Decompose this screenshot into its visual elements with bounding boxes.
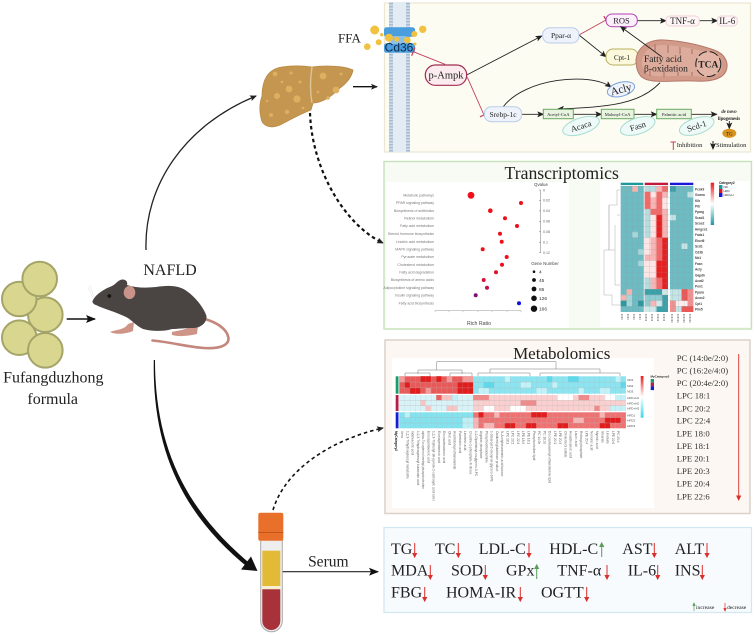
sample labels (627, 378, 639, 428)
Qvalue scale: 0.08 (543, 230, 550, 234)
pathway labels: Pyruvate metabolism (401, 255, 434, 259)
icon: formula pills (2, 262, 63, 368)
node: Malonyl-CoA (601, 109, 634, 119)
metabolite labels: Nervonic acid (590, 431, 594, 451)
arrow: lipid list decrease (737, 354, 741, 500)
sample labels: HFD+H3 (627, 407, 639, 411)
sample labels: HFD3 (627, 424, 635, 428)
gene number legend: 4 (539, 270, 542, 276)
membrane stripes (389, 2, 410, 152)
metabolite labels: Hexadecanoic acid (569, 431, 573, 458)
arrow: dashed liver to transcriptomics (310, 113, 383, 243)
list: altered lipids: LPE 20:3 (677, 466, 710, 476)
metabolite labels: LPE 18:0 (521, 431, 525, 444)
node: ROS (606, 14, 637, 27)
node: ROS: ROS (613, 16, 630, 26)
metabolite labels: 1,2-Dipalmitoyl-sn-glycero-3-PC (474, 431, 478, 477)
gene labels: Acat2 (695, 279, 704, 283)
pathway labels: Linoleic acid metabolism (396, 240, 434, 244)
metabolite labels: Linolenic acid (463, 431, 467, 451)
metabolite labels: Stearate (600, 431, 604, 443)
sample labels (622, 314, 690, 323)
chart: gene expression heatmap (604, 181, 735, 323)
x axis (435, 311, 521, 312)
metabolite labels: LPE 22:6 (611, 431, 615, 444)
gene labels: Gapdh (695, 273, 705, 277)
gene labels: Me1 (695, 256, 701, 260)
node: Fasn (618, 113, 657, 139)
serum marker names: INS (675, 563, 700, 580)
list: altered lipids: LPC 20:2 (677, 403, 710, 413)
metabolite labels: LPE 18:1 (526, 431, 530, 444)
pathway labels: MAPK signaling pathway (395, 248, 434, 252)
heading: Transcriptomics: Transcriptomics (505, 163, 619, 183)
legend: inhibition and stimulation: Inhibition (677, 142, 703, 149)
category legend: ND (724, 185, 729, 189)
metabolite labels: Docosahexaenoic acid (442, 431, 446, 463)
node: Acaca (560, 113, 602, 139)
serum marker names: MDA (391, 563, 429, 580)
sample labels: HFD1 (627, 413, 635, 417)
gene labels: Scad1 (695, 216, 705, 220)
gene number legend: 166 (539, 306, 547, 312)
metabolite labels: Retinoyl phosphate (579, 431, 583, 459)
metabolite labels: Phosphoethanolamine (484, 431, 488, 463)
list: altered lipids: LPC 22:4 (677, 416, 711, 426)
gene labels: Gcana (695, 193, 705, 197)
icon: fatty acid droplets (364, 26, 426, 50)
serum marker names: ALT (675, 541, 705, 558)
metabolite labels: Eicosapentaenoic acid (437, 431, 441, 463)
second group detail (645, 186, 656, 289)
icon: mitochondrion: TCA (698, 60, 718, 70)
category legend: HFD+H (724, 193, 734, 197)
metabolite labels: MyCategory2 (394, 431, 398, 451)
node: Ppar-alpha: Ppar-α (551, 31, 571, 40)
list: altered lipids: PC (16:2e/4:0) (677, 365, 728, 375)
metabolite labels: Linoleate (606, 431, 610, 444)
category legend (650, 374, 670, 390)
node: Fasn: Fasn (629, 119, 648, 133)
metabolite labels: Oleic acid (447, 431, 451, 445)
serum marker names: FBG (391, 584, 423, 601)
panel: metabolomics (385, 340, 750, 514)
category legend (719, 181, 735, 197)
metabolite labels: Lauric acid (574, 431, 578, 447)
pathway labels: Biosynthesis of amino acids (391, 278, 434, 282)
increase arrows (535, 543, 604, 579)
gene labels: Pparg (695, 210, 704, 214)
gene labels: Ppara (695, 290, 704, 294)
node: Palmitic acid (657, 109, 691, 119)
gene labels: Cd36 (695, 250, 703, 254)
gene labels: Fads1 (695, 233, 704, 237)
arrow: serum line (282, 571, 378, 573)
dendrogram (604, 190, 620, 305)
metabolite labels: Arachidonoyl ethanolamide (453, 431, 457, 470)
serum marker names (391, 541, 705, 601)
list: altered lipids (677, 353, 728, 501)
metabolite labels: LPC 22:4 (516, 431, 520, 445)
metabolite labels (394, 431, 620, 502)
category legend: MyCategory2 (650, 374, 670, 378)
metabolite labels: alpha-Tocopherol methyl phosphocholine (421, 431, 425, 489)
pathway labels: Fatty acid degradation (399, 270, 434, 274)
Qvalue scale: 0.12 (543, 251, 550, 255)
node: Srebp-1c: Srebp-1c (489, 110, 517, 119)
metabolite labels: Phosphocholine lipid (532, 431, 536, 460)
metabolite labels: N-Acetylneuraminic acid lactose (500, 431, 504, 477)
node: IL-6: IL-6 (719, 16, 736, 26)
dendrogram (405, 362, 620, 376)
pathway labels: Insulin signaling pathway (395, 294, 434, 298)
gene number legend: 85 (539, 287, 545, 293)
metabolite labels: PC 20:4 (616, 431, 620, 443)
metabolite labels: Oxidized glutathione product (495, 431, 499, 472)
text: de novo lipogenesis: lipogenesis (718, 117, 740, 122)
metabolite labels: LPE 20:4 (584, 431, 588, 444)
x axis title: Rich Ratio (467, 321, 491, 327)
serum marker names: TNF-α (557, 563, 602, 580)
text: formula label: Fufangduzhong (3, 370, 104, 387)
node: Ppar-alpha (543, 28, 579, 43)
serum marker names: OGTT (541, 584, 584, 601)
Qvalue scale (534, 182, 550, 255)
gene labels: Klb (695, 199, 700, 203)
gene labels: Plin5 (695, 308, 703, 312)
metabolite labels: Palmitoleic acid (458, 431, 462, 453)
metabolite labels: 1-Stearoyl-2-oleoyl-sn-glycero-3-PE (490, 431, 494, 482)
pathway labels: Steroid hormone biosynthesis (388, 232, 434, 236)
serum marker names: AST (622, 541, 653, 558)
arrow: dashed tube to metabolomics (273, 428, 383, 510)
Qvalue scale: 0 (543, 188, 545, 192)
color scale (641, 376, 644, 418)
category legend: Category2 (719, 181, 735, 185)
legend: increase and decrease: increase (696, 605, 715, 611)
serum marker names: IL-6 (628, 563, 656, 580)
gene number legend: 45 (539, 278, 545, 284)
arrow: liver to pathway panel (353, 86, 377, 88)
gene labels: Fasn (695, 262, 702, 266)
bubbles (468, 192, 523, 305)
legend: inhibition and stimulation: Stimulation (716, 142, 747, 149)
sample labels: ND3 (627, 390, 634, 394)
node: Srebp-1c (484, 107, 522, 122)
node: TG (722, 129, 736, 138)
node: Malonyl-CoA: Malonyl-CoA (605, 112, 631, 117)
Qvalue scale: 0.02 (543, 199, 550, 203)
gene labels: Elovl6 (695, 239, 705, 243)
Qvalue scale: 0.04 (543, 209, 550, 213)
color scale (711, 183, 714, 225)
node: Acaca: Acaca (569, 118, 593, 134)
sample labels: HFD+H1 (627, 396, 639, 400)
list: altered lipids: LPE 22:6 (677, 491, 710, 501)
Qvalue scale: 0.06 (543, 220, 550, 224)
Qvalue scale: Qvalue (534, 182, 549, 187)
gene labels: Pcsk9 (695, 187, 704, 191)
heat cells (621, 186, 693, 312)
gene number legend (531, 261, 559, 312)
label: serum: Serum (308, 554, 349, 571)
icon: mouse (88, 279, 229, 348)
metabolite labels: Creatine-1-phosphate-6-ribose (468, 431, 472, 475)
node: Acly: Acly (609, 81, 633, 98)
metabolite labels: 1,2,3-Trihydroxybenzyl butanoate acid (416, 431, 420, 485)
metabolite labels: Docosahexaenoyl ethanolamine lipid (548, 431, 552, 483)
icon: Cd36 transporter (384, 27, 415, 55)
metabolite labels: Myristic acid (595, 431, 599, 449)
gene labels: Acly (695, 268, 702, 272)
metabolite labels: 1,2,3-Trihydroxybenzyl metabolite (405, 431, 409, 479)
metabolite labels: PC 14:0e (537, 431, 541, 445)
gene number legend: Gene Number (531, 261, 559, 266)
metabolite labels: Indoleacetic acid (410, 431, 414, 455)
text: de novo lipogenesis: de novo (721, 110, 737, 115)
pathway labels: Fatty acid metabolism (400, 224, 434, 228)
label: FFA: FFA (338, 31, 361, 46)
pathway connectors (413, 20, 729, 128)
gene labels: Scd1 (695, 245, 703, 249)
label: NAFLD: NAFLD (143, 262, 197, 279)
node: TNF-alpha: TNF-α (670, 16, 695, 26)
node: p-Ampk: p-Ampk (428, 70, 464, 82)
list: altered lipids: LPE 18:0 (677, 428, 710, 438)
icon: Cd36 transporter: Cd36 (385, 41, 414, 55)
heading: Metabolomics: Metabolomics (513, 344, 610, 363)
serum marker names: TG (391, 541, 413, 558)
gene labels: Hmgcs1 (695, 227, 708, 231)
metabolite labels: LPC 18:1 (505, 431, 509, 445)
metabolite labels: LPE 20:1 (553, 431, 557, 444)
gene labels: Scos2 (695, 222, 705, 226)
pathway labels: Fatty acid biosynthesis (399, 302, 434, 306)
list: altered lipids: LPE 20:1 (677, 454, 710, 464)
icon: blood tube (258, 513, 283, 632)
serum marker names: HOMA-IR (446, 584, 517, 601)
legend: increase and decrease (693, 603, 747, 611)
chart: KEGG bubble plot (383, 182, 559, 327)
list: altered lipids: LPE 20:4 (677, 479, 710, 489)
icon: mitochondrion: β-oxidation (644, 64, 688, 74)
metabolite labels: LPE 20:3 (558, 431, 562, 444)
column group bars (621, 183, 693, 185)
metabolite labels: 1,2,3-Triphenyl-1H-pyrrole-2-carboxylic acid ester (432, 431, 436, 502)
gene labels: Acox2 (695, 296, 705, 300)
serum marker names: TC (435, 541, 455, 558)
panel: transcriptomics (383, 162, 752, 329)
node: Acetyl-CoA (543, 109, 573, 119)
gene labels: Pltr (695, 204, 701, 208)
node: Acetyl-CoA: Acetyl-CoA (547, 112, 570, 117)
serum marker names: SOD (451, 563, 483, 580)
Qvalue scale: 0.1 (543, 240, 548, 244)
pathway labels: Retinol metabolism (404, 216, 434, 220)
metabolite labels: Eicosapentaenoic acid (426, 431, 430, 463)
metabolite labels: Arginine phosphate (479, 431, 483, 459)
icon: mitochondrion (558, 27, 727, 109)
membrane (389, 2, 410, 152)
node: TG: TG (726, 132, 733, 137)
metabolite labels: Cholesterol sulfate (563, 431, 567, 458)
sample labels: HFD+H2 (627, 401, 639, 405)
arrow: tapered mouse to blood tube (154, 360, 258, 571)
panel: signalling pathway (338, 2, 750, 152)
list: altered lipids: LPE 18:1 (677, 441, 710, 451)
pathway labels (383, 194, 434, 306)
node: Cpt-1: Cpt-1 (614, 54, 630, 62)
pathway labels: Metabolic pathways (403, 194, 434, 198)
pathway labels: PPAR signaling pathway (396, 201, 434, 205)
gene labels: Cpt1 (695, 302, 702, 306)
icon: fatty liver (260, 66, 353, 127)
node: Palmitic acid: Palmitic acid (662, 112, 687, 117)
metabolite labels: LPC 20:2 (511, 431, 515, 445)
decrease arrows (413, 543, 709, 601)
sample labels: HFD2 (627, 419, 635, 423)
list: altered lipids: PC (14:0e/2:0) (677, 353, 728, 363)
gene labels: Pon1 (695, 285, 703, 289)
serum marker names: LDL-C (479, 541, 526, 558)
legend: increase and decrease: decrease (727, 605, 747, 611)
category legend: HFD (724, 189, 730, 193)
gene number legend: 126 (539, 296, 547, 302)
list: altered lipids: PC (20:4e/2:0) (677, 378, 728, 388)
serum marker names: HDL-C (549, 541, 598, 558)
gene labels (695, 187, 708, 312)
node: Cpt-1 (606, 49, 638, 65)
arrow: pills to mouse (67, 318, 95, 320)
list: altered lipids: LPC 18:1 (677, 391, 710, 401)
sample labels: ND2 (627, 384, 634, 388)
node: Scd-1: Scd-1 (686, 118, 708, 134)
third group detail (670, 192, 693, 312)
icon: mitochondrion: Fatty acid (644, 55, 682, 65)
pathway labels: Adipocytokine signaling pathway (383, 286, 434, 290)
panel: serum indicators (384, 528, 752, 612)
pathway labels: Cholesterol metabolism (397, 263, 434, 267)
node: Scd-1 (677, 113, 716, 139)
heat cells (399, 376, 626, 428)
node: p-Ampk (425, 65, 467, 85)
pathway labels: Biosynthesis of antibiotics (394, 209, 434, 213)
metabolite labels: Urea (400, 431, 404, 438)
node: Acly (606, 79, 636, 100)
arrow: mouse to liver (146, 96, 256, 250)
first group detail (621, 186, 644, 306)
serum marker names: GPx (506, 563, 534, 580)
text: formula label: formula (27, 391, 78, 408)
metabolite labels: PC 16:2e (542, 431, 546, 445)
sample labels: ND1 (627, 378, 634, 382)
legend: inhibition and stimulation (670, 141, 747, 150)
group sidebar (396, 376, 398, 428)
chart: metabolite heatmap (394, 362, 670, 502)
